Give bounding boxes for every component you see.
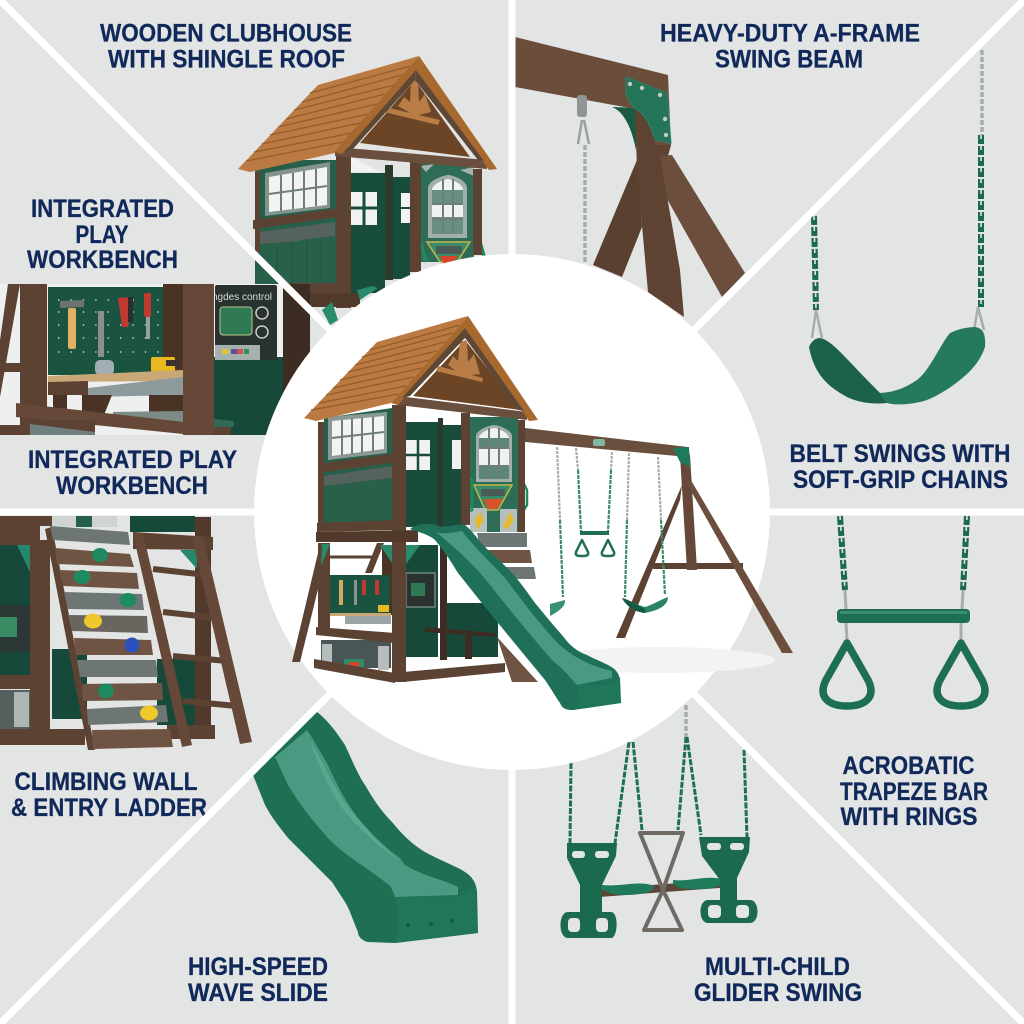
illustration: swing frame [525,428,793,653]
heading: workbench upper [27,195,178,274]
heading: workbench upper: WORKBENCH [27,246,178,274]
heading: trapeze bar: WITH RINGS [840,803,978,831]
heading: wooden clubhouse: WOODEN CLUBHOUSE [100,20,352,48]
heading: workbench upper: PLAY [76,221,129,249]
heading: glider swing [694,953,862,1007]
illustration: climbing wall [0,516,252,750]
illustration: glider swing [560,705,758,938]
label: control sign: ngdes control [212,292,272,303]
panel: belt swing [790,50,1010,494]
heading: climbing wall: & ENTRY LADDER [11,794,207,822]
panel: wave slide [188,712,478,1007]
heading: wave slide: HIGH-SPEED [188,953,328,981]
illustration: belt swing [809,50,985,404]
heading: wooden clubhouse [100,20,352,74]
panel: glider swing [560,705,862,1007]
panel: trapeze bar [823,516,988,831]
heading: a-frame swing beam: SWING BEAM [715,46,863,74]
heading: glider swing: MULTI-CHILD [705,953,850,981]
heading: trapeze bar: ACROBATIC [842,752,974,780]
panel: workbench [0,195,310,500]
heading: workbench lower [28,446,237,500]
heading: belt swings: SOFT-GRIP CHAINS [793,466,1008,494]
heading: belt swings [790,440,1010,494]
heading: wave slide [188,953,328,1007]
heading: climbing wall [11,768,207,822]
illustration: a-frame beam [515,37,745,317]
heading: wooden clubhouse: WITH SHINGLE ROOF [108,46,345,74]
illustration: workbench [0,284,310,435]
illustration: trapeze [823,516,985,706]
illustration: wave slide [253,712,478,943]
heading: a-frame swing beam: HEAVY-DUTY A-FRAME [660,20,920,48]
heading: trapeze bar: TRAPEZE BAR [840,778,988,806]
illustration: slide [410,524,621,710]
heading: workbench upper: INTEGRATED [31,195,174,223]
illustration: clubhouse [238,56,497,325]
heading: glider swing: GLIDER SWING [694,979,862,1007]
heading: trapeze bar [840,752,988,831]
center circle: full playset [254,254,793,770]
panel: climbing wall [0,516,252,822]
panel: wooden clubhouse [100,20,497,325]
heading: workbench lower: WORKBENCH [56,472,208,500]
heading: workbench lower: INTEGRATED PLAY [28,446,237,474]
panel: a-frame swing beam [515,20,920,317]
heading: a-frame swing beam [660,20,920,74]
illustration: clubhouse tower [292,316,538,683]
heading: climbing wall: CLIMBING WALL [14,768,198,796]
heading: wave slide: WAVE SLIDE [188,979,328,1007]
